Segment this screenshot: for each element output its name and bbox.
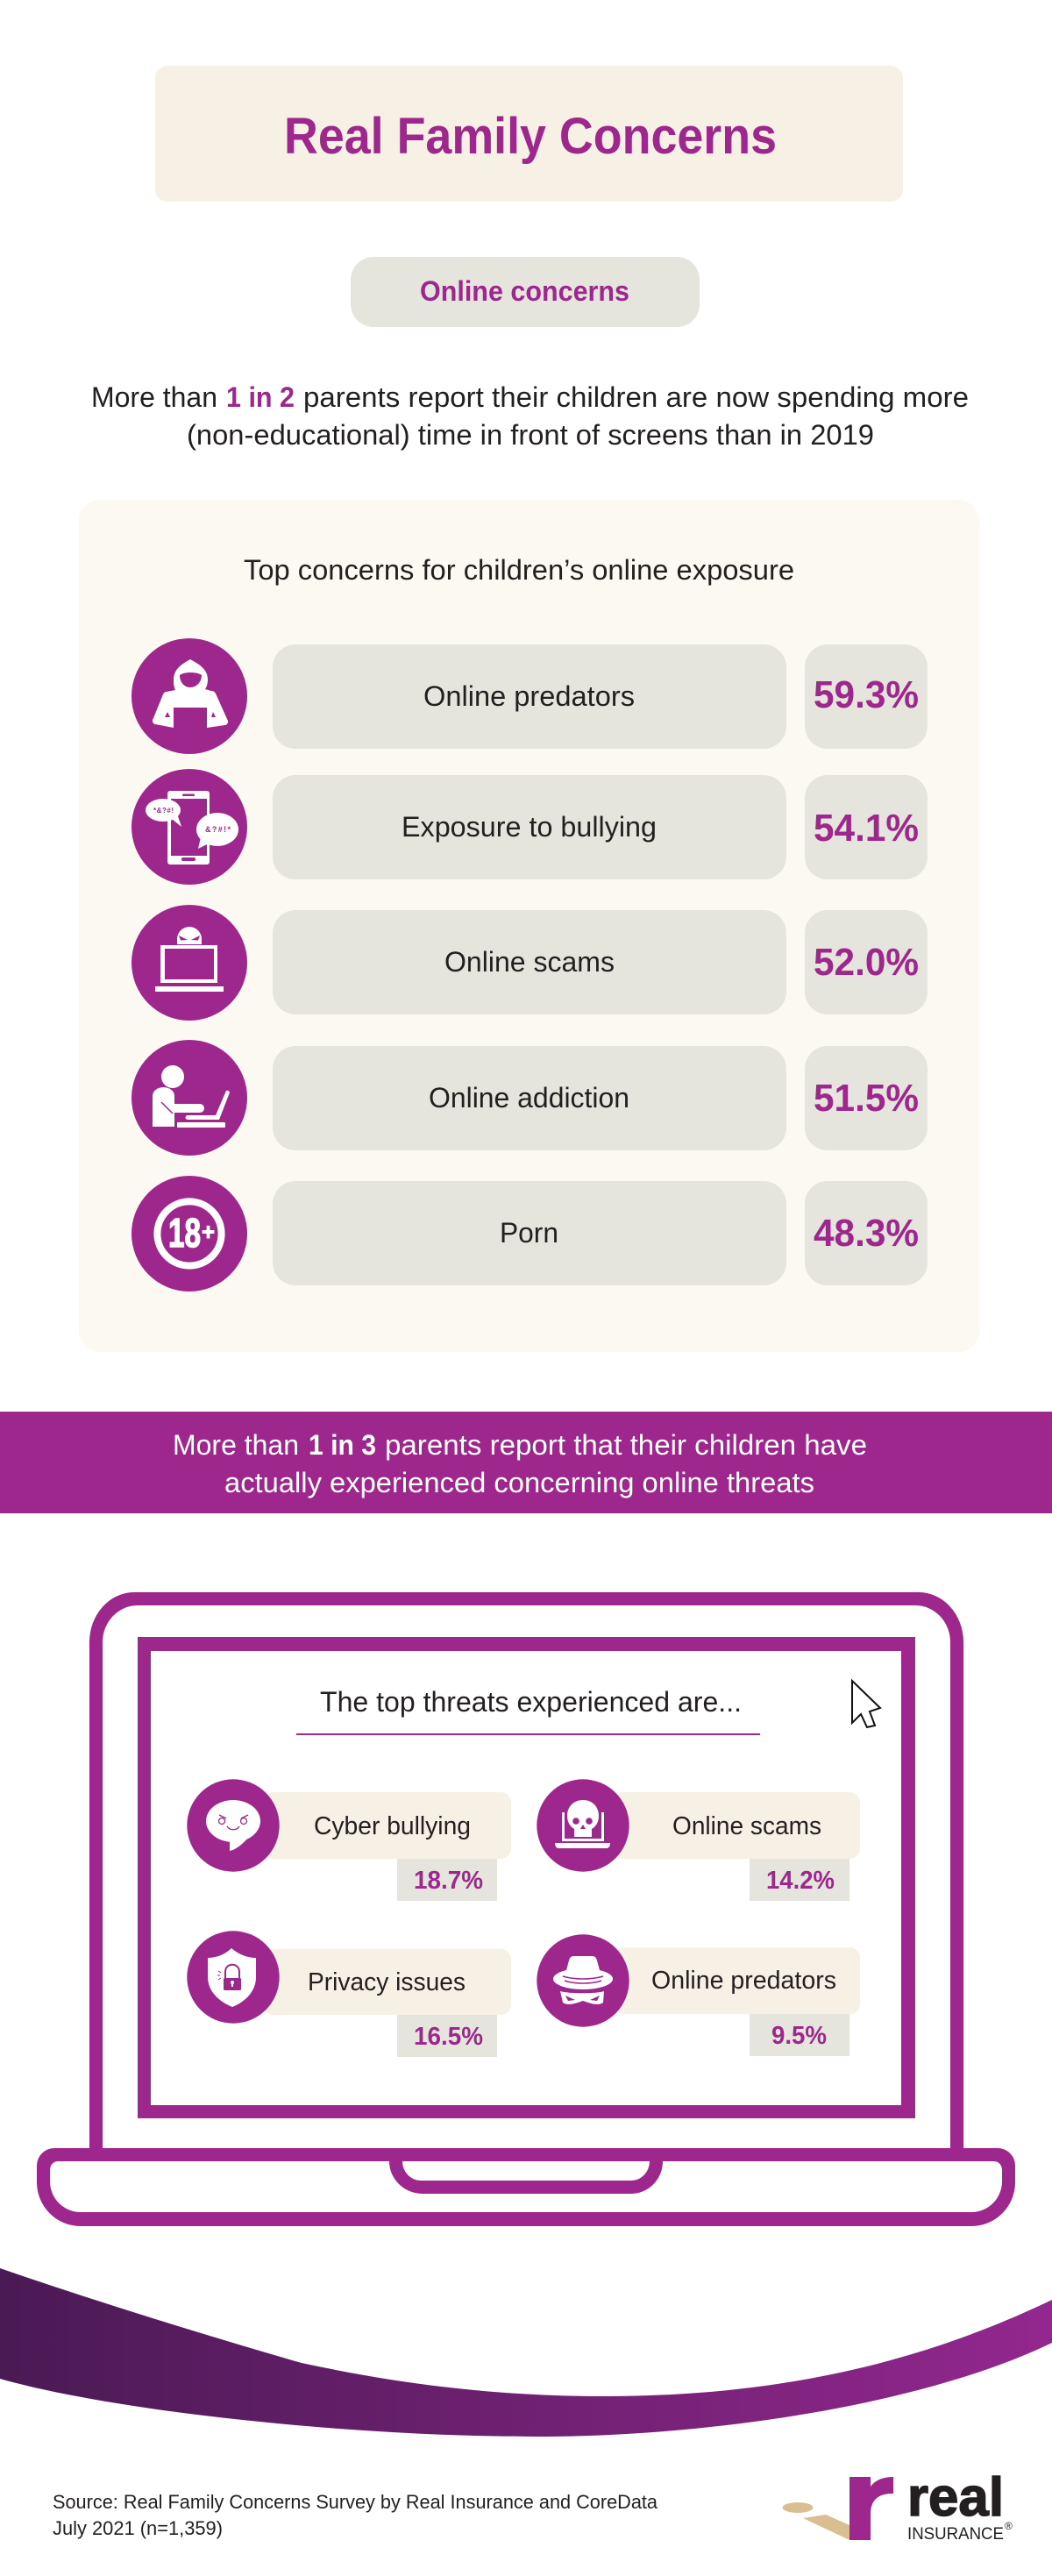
laptop illustration — [37, 1592, 1015, 2226]
threat: cyber bullying: Cyber bullying — [314, 1812, 471, 1840]
threat: online scams: Online scams — [672, 1812, 821, 1840]
banner: 1 in 3 parents — [0, 1412, 1052, 1513]
row: online scams: Online scams — [444, 946, 615, 978]
icon: angry speech bubble — [187, 1779, 280, 1872]
threat: online predators: 9.5% — [771, 2022, 827, 2050]
icon: phone with speech bubbles: *&?#! — [153, 807, 174, 815]
threat: online scams — [537, 1779, 860, 1901]
laptop screen frame — [138, 1637, 915, 2118]
section heading: online concerns: Online concerns — [420, 275, 629, 307]
decorative wave — [0, 2268, 1052, 2437]
panel: top concerns — [79, 500, 979, 1352]
threat: online predators — [537, 1934, 860, 2056]
logo: real insurance: INSURANCE — [907, 2525, 1004, 2544]
intro text — [91, 381, 969, 451]
row: online predators: Online predators — [423, 680, 635, 712]
banner: 1 in 3 parents: parents report that their children have — [385, 1429, 867, 1461]
logo: real insurance: ® — [1005, 2520, 1013, 2532]
row: exposure to bullying: Exposure to bullying — [402, 811, 657, 843]
icon: 18 plus: + — [202, 1219, 215, 1245]
row: online addiction: 51.5% — [814, 1077, 919, 1120]
row: porn: 48.3% — [814, 1212, 919, 1255]
row: online scams: 52.0% — [814, 941, 919, 984]
threat: privacy issues — [187, 1931, 511, 2057]
intro text: 1 in 2 — [226, 381, 295, 413]
icon: phone with speech bubbles — [132, 769, 247, 885]
threat: online scams: 14.2% — [766, 1867, 835, 1895]
banner: 1 in 3 parents: actually experienced concerning online threats — [224, 1467, 814, 1498]
panel heading: Top concerns for children’s online exposure — [244, 554, 794, 586]
screen heading: The top threats experienced are... — [320, 1686, 742, 1718]
title — [155, 66, 903, 202]
source note: Source: Real Family Concerns Survey by Real Insurance and CoreData — [53, 2491, 658, 2513]
logo: real insurance: real — [907, 2467, 1004, 2528]
row: online scams — [132, 905, 928, 1021]
row: porn: Porn — [500, 1217, 558, 1249]
row: exposure to bullying — [132, 769, 928, 885]
laptop lid — [89, 1592, 963, 2148]
logo: real insurance — [782, 2467, 1013, 2544]
laptop notch — [389, 2161, 663, 2194]
row: online predators: 59.3% — [814, 673, 919, 716]
threat: cyber bullying: 18.7% — [414, 1867, 483, 1895]
title: Real Family Concerns — [284, 108, 777, 165]
icon: skull on laptop — [537, 1779, 629, 1872]
intro text: (non-educational) time in front of screens than in 2019 — [187, 419, 874, 451]
icon: 18 plus: 18 — [168, 1210, 201, 1256]
icon: person at laptop — [132, 1040, 247, 1156]
row: porn — [132, 1176, 928, 1292]
icon: 18 plus — [132, 1176, 247, 1292]
row: exposure to bullying: 54.1% — [814, 807, 919, 850]
source note: July 2021 (n=1,359) — [53, 2517, 223, 2539]
threat: privacy issues: Privacy issues — [308, 1968, 466, 1996]
source note — [53, 2491, 658, 2539]
banner: 1 in 3 parents: 1 in 3 — [309, 1429, 376, 1461]
threat: online predators: Online predators — [651, 1967, 836, 1995]
threat: cyber bullying — [187, 1779, 511, 1901]
icon: hooded hacker — [132, 638, 247, 754]
icon: hat and mask — [537, 1934, 629, 2027]
row: online addiction: Online addiction — [429, 1082, 629, 1114]
icon: phone with speech bubbles: &?#!* — [205, 825, 231, 834]
threat: privacy issues: 16.5% — [414, 2023, 483, 2051]
row: online addiction — [132, 1040, 928, 1156]
intro text: parents report their children are now spending more — [303, 381, 969, 413]
banner: 1 in 3 parents: More than — [173, 1429, 299, 1461]
icon: mouse cursor — [852, 1681, 880, 1727]
row: online predators — [132, 638, 928, 754]
section heading: online concerns — [351, 257, 700, 327]
laptop base — [37, 2148, 1015, 2226]
icon: shield with open lock — [187, 1931, 280, 2024]
intro text: More than — [91, 381, 217, 413]
icon: figure behind laptop — [132, 905, 247, 1021]
